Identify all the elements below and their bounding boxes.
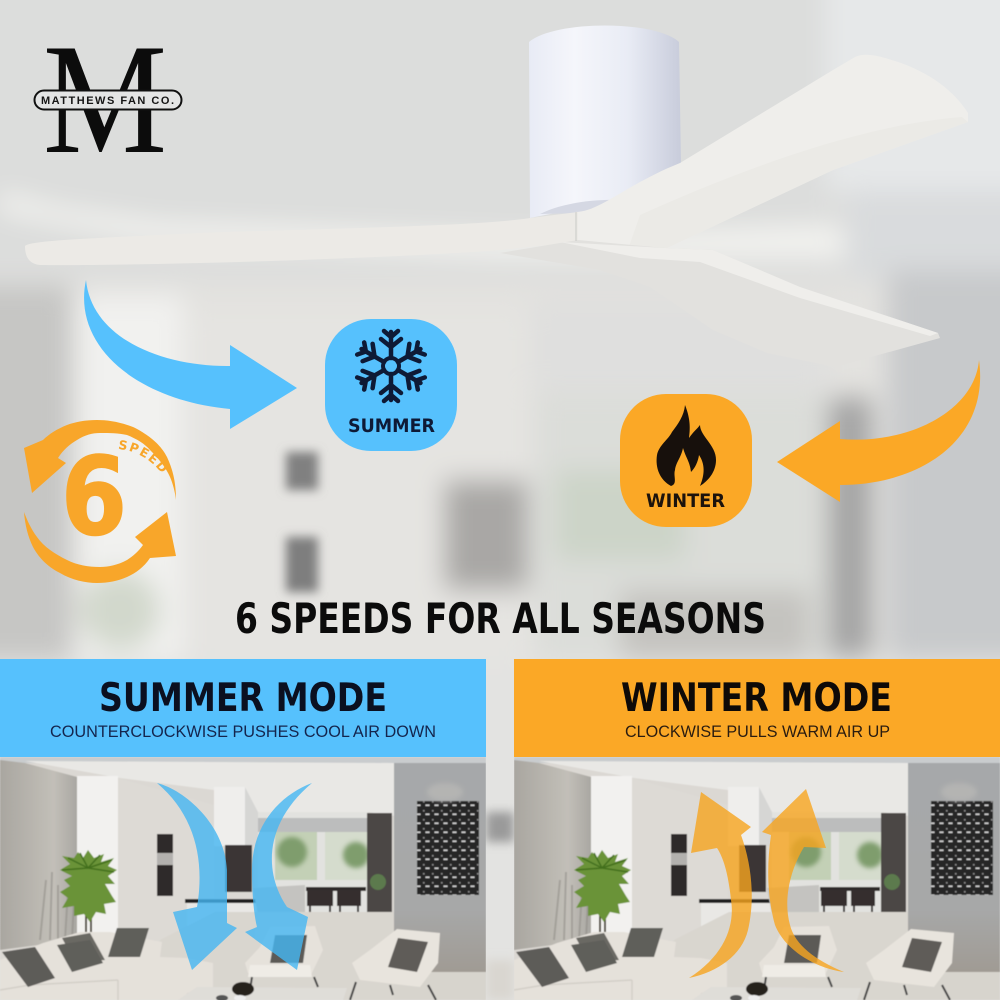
fan blade: right upper (575, 55, 968, 262)
icon: 6 speed badge: SPEED (118, 440, 166, 472)
photo: winter room with airflow (514, 757, 1000, 1000)
logo: Matthews Fan Co.: M (43, 12, 167, 187)
summer label: SUMMER (348, 415, 435, 437)
title: 6 SPEEDS FOR ALL SEASONS (235, 594, 766, 643)
arrows: cool air down (157, 783, 312, 970)
fan blade: left (25, 212, 578, 265)
panel: summer mode (0, 659, 486, 757)
lower rotating arrow (24, 512, 176, 583)
numeral 6: 6 (61, 435, 127, 560)
arrow: blue summer (84, 280, 297, 429)
icon: flame (657, 405, 716, 486)
summer description: COUNTERCLOCKWISE PUSHES COOL AIR DOWN (50, 722, 436, 741)
winter label: WINTER (646, 490, 725, 512)
fan blade: lower right (500, 240, 940, 367)
panel: winter mode (514, 659, 1000, 757)
icon: summer badge (325, 319, 457, 451)
upper rotating arrow (24, 420, 176, 500)
winter description: CLOCKWISE PULLS WARM AIR UP (625, 722, 890, 741)
icon: 6 speed badge (24, 420, 176, 583)
winter heading: WINTER MODE (621, 676, 892, 721)
arrow: orange winter (777, 360, 980, 502)
icon: winter badge (620, 394, 752, 527)
summer heading: SUMMER MODE (99, 676, 387, 721)
icon: snowflake (356, 331, 426, 401)
photo: summer room with airflow (0, 757, 486, 1000)
logo: Matthews Fan Co.: MATTHEWS FAN CO. (41, 95, 174, 107)
hub line (575, 212, 577, 241)
ceiling fan (25, 26, 968, 367)
speed label (118, 449, 173, 520)
fan motor housing (529, 26, 681, 218)
arrows: warm air up (689, 789, 844, 978)
